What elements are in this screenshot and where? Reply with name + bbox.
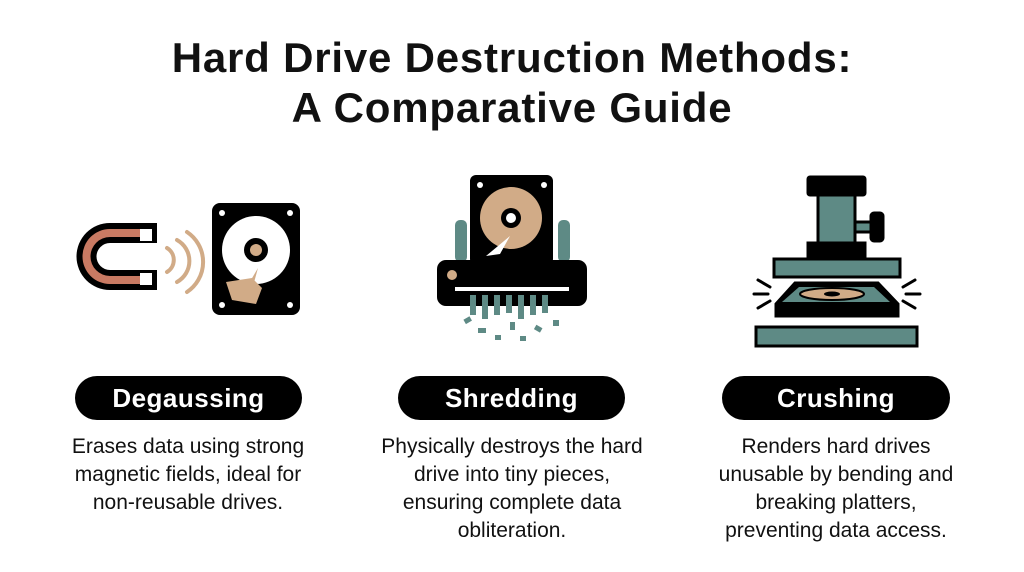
pill: Crushing: [722, 376, 950, 420]
text: shredding: ensuring complete data: [403, 491, 621, 514]
pill: Degaussing: Degaussing: [112, 383, 265, 413]
text: shredding: Physically destroys the hard: [381, 435, 643, 458]
text: degaussing: magnetic fields, ideal for: [75, 463, 301, 486]
text: degaussing: [72, 435, 304, 514]
text: degaussing: Erases data using strong: [72, 435, 304, 458]
text: degaussing: non-reusable drives.: [93, 491, 283, 514]
title: A Comparative Guide: [292, 84, 732, 131]
title: [172, 34, 852, 131]
text: shredding: obliteration.: [458, 519, 566, 542]
icon: crusher press: [754, 177, 920, 346]
text: crushing: unusable by bending and: [719, 463, 953, 486]
title: Hard Drive Destruction Methods:: [172, 34, 852, 81]
pill: Shredding: [398, 376, 625, 420]
text: crushing: preventing data access.: [725, 519, 947, 542]
text: crushing: Renders hard drives: [741, 435, 931, 458]
icon: shredder: [437, 175, 587, 341]
icon: degaussing magnet and drive: [76, 203, 300, 315]
text: shredding: drive into tiny pieces,: [414, 463, 610, 486]
text: shredding: [381, 435, 643, 542]
text: crushing: [719, 435, 953, 542]
pill: Crushing: Crushing: [777, 383, 895, 413]
pill: Degaussing: [75, 376, 302, 420]
pill: Shredding: Shredding: [445, 383, 578, 413]
text: crushing: breaking platters,: [755, 491, 917, 514]
